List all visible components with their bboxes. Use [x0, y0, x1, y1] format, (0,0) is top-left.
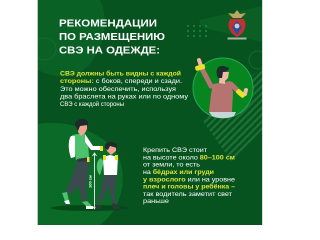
- title: [59, 18, 165, 56]
- text block: placement height: так водитель заметит свет: [143, 192, 232, 198]
- text block: wearing visibility: [60, 70, 188, 108]
- text block: placement height: на высоте около 80–100 см: [143, 156, 236, 162]
- text block: wearing visibility: Это можно обеспечить, используя: [60, 87, 176, 93]
- title: РЕКОМЕНДАЦИИ: [59, 18, 157, 30]
- panel: green background: [34, 0, 267, 225]
- line: left panel edge: [37, 0, 38, 225]
- text block: placement height: на бёдрах или груди: [143, 169, 214, 176]
- text block: wearing visibility: СВЭ должны быть видны с каждой: [60, 70, 181, 78]
- illustration: person with wristbands in circle: [193, 58, 253, 118]
- title: ПО РАЗМЕЩЕНИЮ: [59, 31, 165, 43]
- line: right panel edge: [262, 0, 263, 225]
- icon: police emblem: [228, 10, 246, 40]
- title: СВЭ НА ОДЕЖДЕ:: [59, 44, 160, 56]
- text block: placement height: раньше: [143, 199, 170, 205]
- label: height: 100 см: [88, 175, 92, 188]
- text block: wearing visibility: СВЭ с каждой стороны: [60, 101, 124, 108]
- text block: placement height: Крепить СВЭ стоит: [143, 148, 207, 154]
- decoration: dot grid: [187, 25, 207, 37]
- arrow: height marker: [92, 153, 96, 209]
- text block: placement height: от земли, то есть: [143, 162, 200, 168]
- text block: wearing visibility: стороны: с боков, спереди и сзади.: [60, 79, 182, 85]
- text block: placement height: плеч и головы у ребёнка –: [143, 184, 236, 190]
- text block: placement height: у взрослого или на уровне: [143, 178, 236, 184]
- illustration: adult and child with height marker: [51, 119, 129, 211]
- text block: placement height: [143, 148, 236, 205]
- text block: wearing visibility: два браслета на руках или по одному: [60, 94, 188, 100]
